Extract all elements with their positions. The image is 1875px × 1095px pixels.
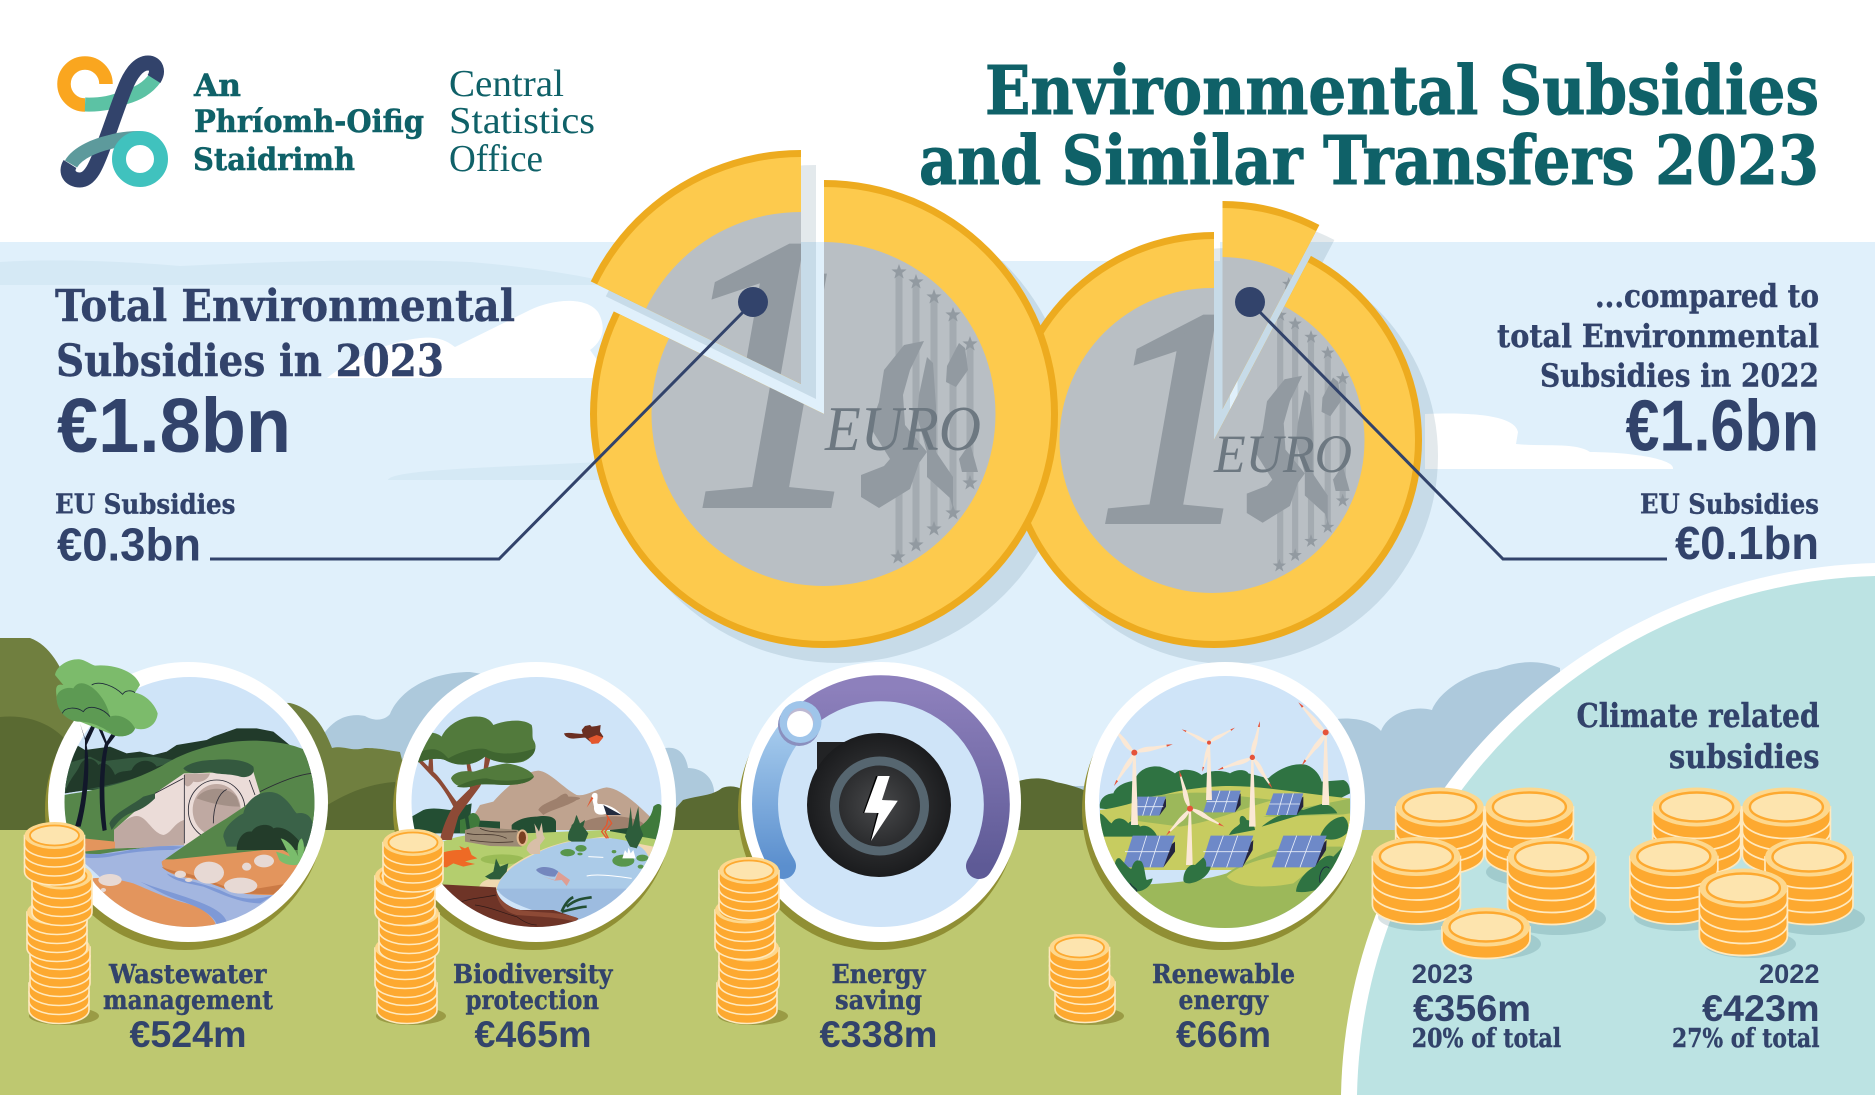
label: biodiversity: Biodiversity — [453, 960, 613, 990]
logo text: English: Office — [449, 138, 543, 180]
label: renewable energy: €66m — [1176, 1014, 1271, 1055]
coin: 2022 total: EURO — [1213, 424, 1352, 484]
coin: 2023 total: 1 — [695, 199, 866, 579]
logo — [64, 63, 161, 180]
right stat block: 2022: total Environmental — [1497, 317, 1819, 355]
climate stat: 2023: €356m — [1413, 988, 1531, 1029]
logo text: Irish: Staidrimh — [193, 142, 355, 178]
climate stat: 2022: 27% of total — [1672, 1024, 1820, 1054]
log — [465, 827, 528, 847]
logo text: English: Central — [449, 63, 564, 105]
climate stat: 2023 — [1412, 959, 1561, 1054]
label: biodiversity — [453, 960, 613, 1055]
label: wastewater: Wastewater — [108, 960, 267, 990]
right stat block: 2022: ...compared to — [1595, 277, 1819, 315]
coin shadows — [582, 165, 1446, 664]
green hills — [0, 638, 1100, 830]
left stat block: 2023: €1.8bn — [57, 383, 291, 469]
coin: 2023 total: EURO — [824, 394, 981, 464]
climate heading — [1576, 696, 1820, 776]
coins: climate 2023 — [1372, 788, 1606, 959]
logo text: Irish — [193, 68, 424, 178]
left stat block: 2023: Subsidies in 2023 — [56, 336, 444, 387]
circle: renewable energy — [1082, 662, 1366, 950]
tree — [55, 659, 158, 831]
bird — [564, 725, 603, 744]
label: biodiversity: protection — [466, 986, 599, 1016]
label: energy saving: saving — [835, 986, 922, 1016]
right stat block: 2022: EU Subsidies — [1640, 490, 1819, 520]
front bushes — [1100, 847, 1345, 892]
coin slice 2023: EU share — [590, 150, 801, 384]
right stat block: 2022 — [1497, 277, 1819, 569]
coin: 2022 total — [1006, 201, 1430, 648]
distant blue hills — [320, 662, 1560, 830]
rabbit — [527, 823, 545, 854]
label: renewable energy — [1152, 960, 1295, 1055]
label: biodiversity: €465m — [474, 1014, 592, 1055]
fox — [440, 846, 477, 867]
climate stat: 2022 — [1672, 959, 1820, 1054]
left stat block: 2023 — [55, 281, 515, 570]
logo text: English: Statistics — [449, 100, 595, 142]
coin stack: biodiversity — [375, 829, 446, 1025]
right stat block: 2022: €0.1bn — [1675, 517, 1819, 569]
climate stat: 2022: 2022 — [1759, 959, 1820, 989]
solar panels — [1123, 791, 1327, 867]
circle: energy saving — [738, 662, 1021, 950]
lily pads — [560, 845, 648, 869]
coins: climate 2022 — [1630, 788, 1865, 958]
label: renewable energy: energy — [1178, 986, 1269, 1016]
right stat block: 2022: €1.6bn — [1626, 386, 1819, 466]
left stat block: 2023: Total Environmental — [55, 281, 515, 332]
circle: biodiversity protection — [393, 662, 676, 950]
coin: 2023 total — [567, 150, 1058, 648]
label: wastewater: €524m — [130, 1014, 246, 1055]
sky background — [0, 242, 1875, 1095]
gauge knob — [778, 701, 822, 746]
climate heading: subsidies — [1669, 737, 1820, 776]
coin slice 2022: EU share — [1222, 201, 1320, 409]
wind turbines — [1107, 701, 1366, 865]
gauge arc — [765, 688, 997, 866]
leader line 2023 — [210, 287, 768, 559]
label: energy saving: Energy — [832, 960, 926, 990]
left stat block: 2023: €0.3bn — [57, 518, 201, 570]
leader line 2022 — [1235, 287, 1667, 559]
right stat block: 2022: Subsidies in 2022 — [1540, 356, 1819, 394]
left stat block: 2023: EU Subsidies — [55, 490, 236, 520]
climate stat: 2023: 20% of total — [1412, 1024, 1561, 1054]
title — [919, 51, 1819, 200]
coin stack: renewable energy — [1050, 934, 1124, 1025]
power icon — [807, 733, 951, 877]
climate stat: 2023: 2023 — [1412, 959, 1473, 989]
stork — [587, 793, 622, 838]
fish — [536, 867, 570, 886]
coin: 2022 total: 1 — [1099, 248, 1252, 586]
ground — [0, 830, 1875, 1095]
climate panel background — [1341, 563, 1875, 1095]
climate stat: 2022: €423m — [1702, 988, 1820, 1029]
logo text: Irish: Phríomh-Oifig — [194, 104, 424, 140]
label: wastewater: management — [103, 986, 273, 1016]
logo text: Irish: An — [193, 68, 241, 104]
circle: wastewater management — [45, 659, 328, 950]
cloud left — [327, 301, 610, 378]
coin stack: energy saving — [715, 857, 788, 1025]
logo text: English — [449, 63, 595, 180]
label: energy saving: €338m — [820, 1014, 938, 1055]
label: energy saving — [820, 960, 938, 1055]
coin slice 2023: EU share: 1 — [672, 169, 844, 549]
climate heading: Climate related — [1576, 696, 1820, 735]
label: renewable energy: Renewable — [1152, 960, 1295, 990]
cloud right — [1425, 413, 1673, 469]
coin stack: wastewater — [24, 822, 99, 1025]
label: wastewater — [103, 960, 273, 1055]
plants — [485, 807, 643, 879]
